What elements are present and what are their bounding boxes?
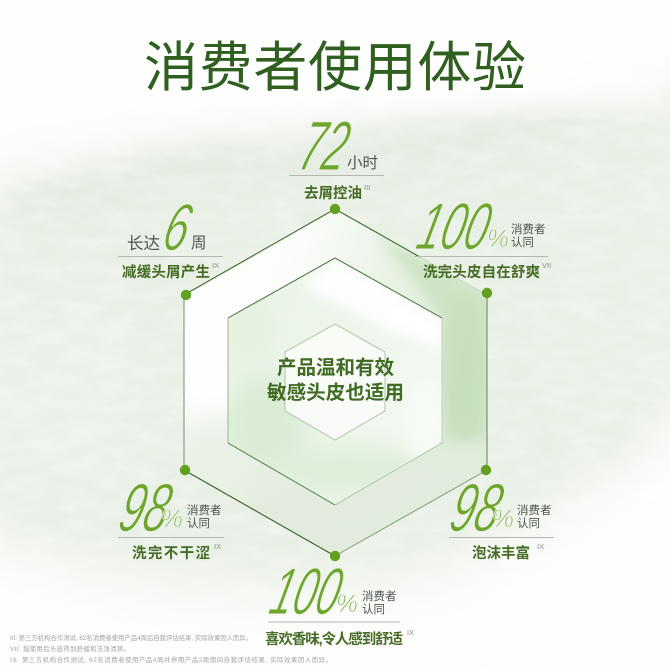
center text xyxy=(267,357,404,404)
stat: 72 hours: 去屑控油 xyxy=(304,184,362,202)
stat: 100% fragrance: 喜欢香味,令人感到舒适 xyxy=(265,630,404,648)
stat: 98% rich foam: % xyxy=(492,505,514,533)
stat: 72 hours: III xyxy=(364,183,370,192)
stat: 6 weeks xyxy=(118,191,223,281)
stat: 100% scalp comfort: VII xyxy=(542,261,551,270)
stat: 100% fragrance: 消费者 xyxy=(362,589,396,603)
stat: 100% fragrance: IX xyxy=(407,628,414,637)
footnotes: III: 第三方机构合作测试, 62名消费者使用产品4周后自我评估结果, 实际效果因人而异。 xyxy=(10,633,252,642)
outer hexagon xyxy=(184,209,487,556)
hexagon diagram xyxy=(175,209,487,556)
stat: 98% not dry: 消费者 xyxy=(187,503,222,517)
inner hexagon xyxy=(285,324,385,440)
stat: 100% scalp comfort: 认同 xyxy=(511,236,534,249)
footnotes: IX: 第三方机构合作测试, 62名消费者使用产品4周并停用产品2周期间自我评估结果, 实际效果因人而异。 xyxy=(10,655,332,664)
stat: 98% rich foam: IX xyxy=(537,542,544,551)
footnotes xyxy=(10,633,332,664)
stat: 98% rich foam: 认同 xyxy=(517,517,540,530)
stat: 100% scalp comfort: % xyxy=(487,225,509,253)
stat: 100% scalp comfort: 洗完头皮自在舒爽 xyxy=(423,263,540,281)
stat: 100% scalp comfort: 消费者 xyxy=(511,222,546,236)
center text: 敏感头皮也适用 xyxy=(267,382,404,404)
stat: 98% rich foam: 98 xyxy=(443,469,510,546)
stat: 72 hours: 72 xyxy=(292,108,357,186)
stat: 100% fragrance: 100 xyxy=(263,555,350,629)
title: 消费者使用体验 xyxy=(144,38,526,98)
stat: 98% not dry: % xyxy=(161,505,183,533)
stat: 6 weeks: 6 xyxy=(156,191,199,265)
stat: 98% rich foam: 消费者 xyxy=(517,503,552,517)
stat: 72 hours: 小时 xyxy=(347,154,378,172)
stat: 6 weeks: IX xyxy=(212,261,219,270)
node dots xyxy=(180,204,492,561)
stat: 98% rich foam: 泡沫丰富 xyxy=(472,544,530,562)
stat: 6 weeks: 周 xyxy=(191,235,207,252)
stat: 100% fragrance: % xyxy=(336,590,358,618)
stat: 6 weeks: 减缓头屑产生 xyxy=(122,263,210,281)
stat: 98% not dry: 98 xyxy=(112,469,179,546)
middle hexagon xyxy=(228,258,442,505)
footnotes: VII: 指使用后头皮得到舒缓和洁净清爽。 xyxy=(10,644,130,653)
stat: 100% fragrance: 认同 xyxy=(362,603,385,616)
stat: 100% fragrance xyxy=(263,555,414,648)
stat: 6 weeks: 长达 xyxy=(127,234,160,253)
stat: 100% scalp comfort: 100 xyxy=(410,190,499,264)
center text: 产品温和有效 xyxy=(277,357,394,379)
stat: 98% not dry: IX xyxy=(214,542,221,551)
stat: 98% not dry: 认同 xyxy=(187,517,210,530)
stat: 98% not dry: 洗完不干涩 xyxy=(132,544,210,562)
